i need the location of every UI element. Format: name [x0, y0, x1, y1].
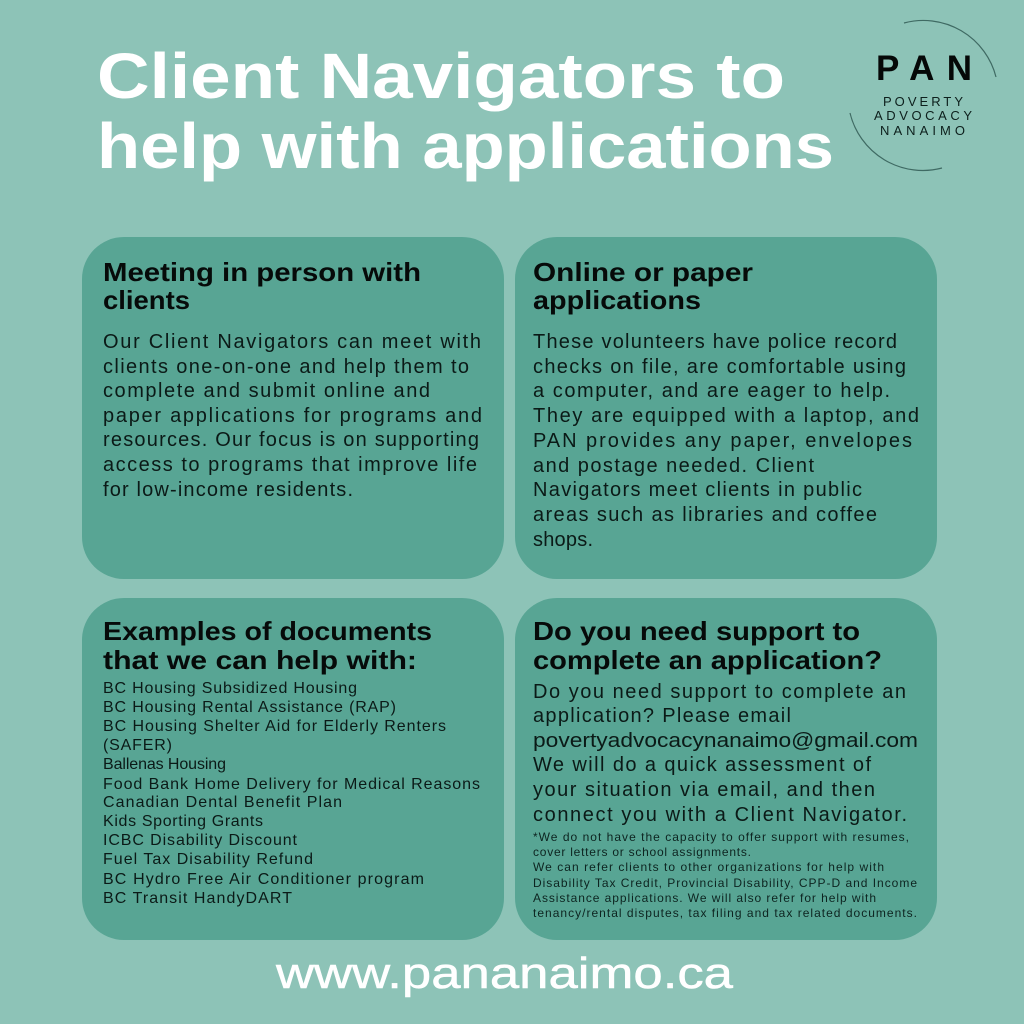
- title: Client Navigators to: [97, 40, 785, 112]
- heading: meeting in person: Meeting in person with: [103, 257, 421, 287]
- document list: ICBC Disability Discount: [103, 832, 298, 849]
- document list: [103, 680, 480, 907]
- document list: BC Housing Rental Assistance (RAP): [103, 699, 396, 716]
- panel: do you need support: [515, 598, 937, 940]
- body text: online or paper: a computer, and are eager to help.: [533, 380, 890, 402]
- body text: do you need support: application? Please email: [533, 705, 791, 727]
- logo: PAN Poverty Advocacy Nanaimo: NANAIMO: [880, 123, 965, 138]
- body text: online or paper: shops.: [533, 529, 593, 551]
- heading: do you need support: [533, 616, 882, 675]
- body text: do you need support: povertyadvocacynanaimo@gmail.com: [533, 730, 918, 752]
- document list: BC Housing Shelter Aid for Elderly Renters: [103, 718, 446, 735]
- body text: online or paper: and postage needed. Client: [533, 455, 814, 477]
- body text: online or paper: They are equipped with a laptop, and: [533, 405, 919, 427]
- body text: meeting in person: clients one-on-one and help them to: [103, 356, 469, 378]
- body text: online or paper: areas such as libraries and coffee: [533, 504, 877, 526]
- document list: Canadian Dental Benefit Plan: [103, 794, 342, 811]
- document list: (SAFER): [103, 737, 172, 754]
- panel: online or paper applications: [515, 237, 937, 579]
- logo: PAN Poverty Advocacy Nanaimo: PAN: [876, 49, 972, 88]
- body text: meeting in person: Our Client Navigators can meet with: [103, 331, 481, 353]
- fine print note: We can refer clients to other organizations for help with: [533, 860, 884, 874]
- heading: meeting in person: [103, 257, 421, 315]
- body text: online or paper: checks on file, are comfortable using: [533, 356, 906, 378]
- document list: BC Housing Subsidized Housing: [103, 680, 357, 697]
- fine print note: Disability Tax Credit, Provincial Disability, CPP-D and Income: [533, 876, 917, 890]
- panel: meeting in person: [82, 237, 504, 579]
- body text: meeting in person: [103, 331, 482, 501]
- body text: do you need support: Do you need support to complete an: [533, 681, 906, 703]
- title: help with applications: [97, 110, 834, 182]
- heading: online or paper: Online or paper: [533, 257, 753, 287]
- title: [97, 40, 834, 182]
- heading: online or paper: applications: [533, 285, 701, 315]
- fine print note: tenancy/rental disputes, tax filing and tax related documents.: [533, 906, 917, 920]
- document list: Fuel Tax Disability Refund: [103, 851, 313, 868]
- logo: PAN Poverty Advocacy Nanaimo: ADVOCACY: [874, 108, 972, 123]
- heading: online or paper: [533, 257, 753, 315]
- heading: examples of documents: Examples of documents: [103, 616, 432, 646]
- logo: PAN Poverty Advocacy Nanaimo: POVERTY: [883, 94, 963, 109]
- fine print note: Assistance applications. We will also refer for help with: [533, 891, 876, 905]
- body text: meeting in person: for low-income residents.: [103, 479, 353, 501]
- body text: online or paper: [533, 331, 919, 551]
- document list: Kids Sporting Grants: [103, 813, 263, 830]
- logo: PAN Poverty Advocacy Nanaimo: [850, 20, 996, 170]
- document list: BC Hydro Free Air Conditioner program: [103, 871, 424, 888]
- fine print note: *We do not have the capacity to offer support with resumes,: [533, 830, 909, 844]
- body text: online or paper: Navigators meet clients in public: [533, 479, 862, 501]
- document list: Food Bank Home Delivery for Medical Reasons: [103, 776, 480, 793]
- body text: do you need support: We will do a quick assessment of: [533, 754, 871, 776]
- body text: meeting in person: access to programs that improve life: [103, 454, 477, 476]
- body text: online or paper: These volunteers have police record: [533, 331, 897, 353]
- heading: do you need support: complete an application?: [533, 645, 882, 675]
- fine print note: cover letters or school assignments.: [533, 845, 751, 859]
- document list: Ballenas Housing: [103, 756, 226, 773]
- heading: do you need support: Do you need support to: [533, 616, 860, 646]
- document list: BC Transit HandyDART: [103, 890, 292, 907]
- fine print note: [533, 830, 917, 920]
- heading: examples of documents: that we can help with:: [103, 645, 417, 675]
- body text: do you need support: connect you with a Client Navigator.: [533, 804, 907, 826]
- panel: examples of documents: [82, 598, 504, 940]
- body text: meeting in person: resources. Our focus is on supporting: [103, 429, 479, 451]
- body text: meeting in person: paper applications for programs and: [103, 405, 482, 427]
- body text: do you need support: [533, 681, 918, 826]
- body text: do you need support: your situation via email, and then: [533, 779, 875, 801]
- website url: www.pananaimo.ca: [275, 949, 734, 998]
- heading: examples of documents: [103, 616, 432, 675]
- body text: meeting in person: complete and submit online and: [103, 380, 430, 402]
- body text: online or paper: PAN provides any paper, envelopes: [533, 430, 912, 452]
- heading: meeting in person: clients: [103, 285, 190, 315]
